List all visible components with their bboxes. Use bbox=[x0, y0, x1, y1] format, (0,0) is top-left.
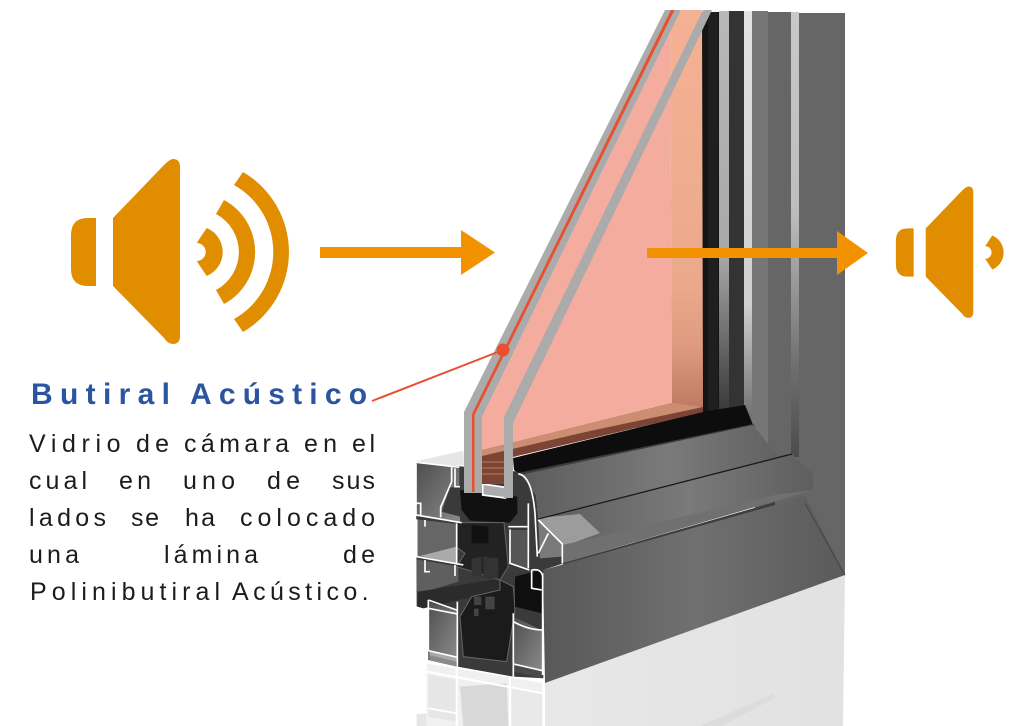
arrow: attenuated sound through glass bbox=[647, 231, 868, 275]
text block: description: Polinibutiral bbox=[30, 578, 225, 606]
text block: description: lados bbox=[29, 504, 110, 532]
text block: description: se bbox=[131, 504, 161, 532]
strut chamber bbox=[538, 521, 562, 558]
arrow: incoming sound bbox=[320, 230, 495, 275]
text block: description: uno bbox=[183, 467, 240, 495]
window floor reflection bbox=[417, 575, 845, 726]
text block: description: de bbox=[267, 467, 305, 495]
text block: description: lámina bbox=[164, 541, 262, 569]
aluminium cross-section profile bbox=[415, 451, 563, 678]
heading: Butiral Acústico: Butiral bbox=[31, 378, 177, 411]
text block: description: colocado bbox=[240, 504, 380, 532]
chambers bbox=[416, 463, 460, 523]
text block: description: en bbox=[304, 430, 342, 458]
window frame vertical profile bbox=[692, 11, 845, 575]
polyamide thermal break lower bbox=[460, 580, 515, 662]
icon: small speaker bbox=[896, 186, 1004, 318]
black gasket bbox=[460, 490, 517, 523]
glass spacer bbox=[483, 484, 505, 498]
text block: description: sus bbox=[332, 467, 377, 495]
heading: Butiral Acústico: Acústico bbox=[190, 378, 374, 411]
icon: large speaker bbox=[71, 159, 289, 344]
text block: description bbox=[29, 430, 380, 606]
white extrusion outlines bbox=[416, 462, 463, 576]
text block: description: de bbox=[343, 541, 379, 569]
glass: bottom sill shadow bbox=[482, 403, 703, 484]
right chamber bbox=[510, 530, 528, 568]
text block: description: una bbox=[29, 541, 83, 569]
text block: description: de bbox=[136, 430, 174, 458]
text block: description: cámara bbox=[184, 430, 293, 458]
text block: description: Vidrio bbox=[29, 430, 126, 458]
black glazing band bbox=[513, 405, 755, 477]
glass: inner pane bbox=[504, 10, 712, 498]
glass: laminated air chamber bbox=[482, 10, 706, 450]
heading: Butiral Acústico bbox=[31, 378, 374, 411]
text block: description: cual bbox=[29, 467, 91, 495]
text block: description: Acústico. bbox=[232, 578, 373, 606]
glass: laminated outer pane with acoustic butyral bbox=[464, 10, 681, 493]
text block: description: el bbox=[352, 430, 379, 458]
top face of outer frame bbox=[415, 451, 464, 466]
polyamide thermal break upper bbox=[456, 523, 508, 580]
text block: description: en bbox=[119, 467, 155, 495]
callout leader line and dot bbox=[372, 344, 510, 401]
section base fill bbox=[416, 462, 563, 678]
aluminium sash faces bbox=[520, 425, 845, 683]
text block: description: ha bbox=[185, 504, 217, 532]
floor contact shadow bbox=[429, 655, 457, 667]
